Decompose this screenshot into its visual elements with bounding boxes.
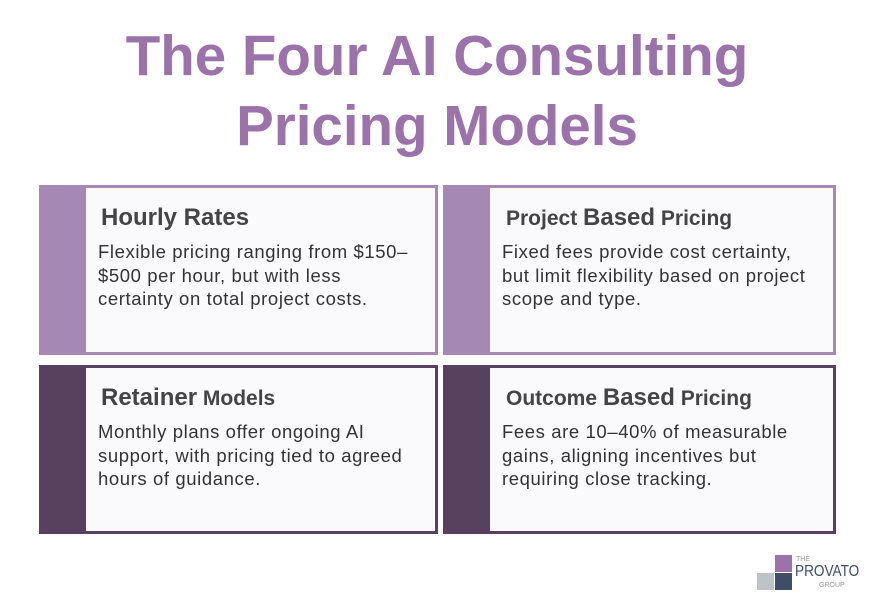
panel: retainer [39,365,438,534]
heading: retainer: Retainer Models [101,384,275,411]
text: outcome: Fees are 10–40% of measurable [502,421,788,442]
heading: outcome: Outcome Based Pricing [506,384,752,411]
text: project: scope and type. [502,288,642,309]
text: project: Fixed fees provide cost certainty, [502,241,791,262]
logo: THE [796,556,810,563]
title [126,24,748,157]
logo: GROUP [819,582,845,589]
text: hourly: certainty on total project costs. [98,288,368,309]
panel: project based [443,185,836,355]
title: Pricing Models [236,94,638,157]
text: outcome [502,421,788,489]
text: retainer: support, with pricing tied to agreed [98,444,402,466]
text: hourly: $500 per hour, but with less [98,264,341,286]
logo: PROVATO [795,563,859,580]
heading: project: Project Based Pricing [506,204,732,231]
heading: hourly: Hourly Rates [101,204,249,231]
text: outcome: gains, aligning incentives but [502,444,757,466]
text: project [502,241,806,309]
text: project: but limit flexibility based on project [502,264,806,286]
text: retainer: hours of guidance. [98,468,261,489]
text: retainer: Monthly plans offer ongoing AI [98,421,365,442]
logo [757,555,859,590]
title: The Four AI Consulting [126,24,748,87]
text: hourly: Flexible pricing ranging from $150– [98,241,408,262]
text: outcome: requiring close tracking. [502,468,712,489]
text: hourly [98,241,408,309]
panel: hourly rates [39,185,438,355]
text: retainer [98,421,402,489]
panel: outcome [443,365,836,534]
